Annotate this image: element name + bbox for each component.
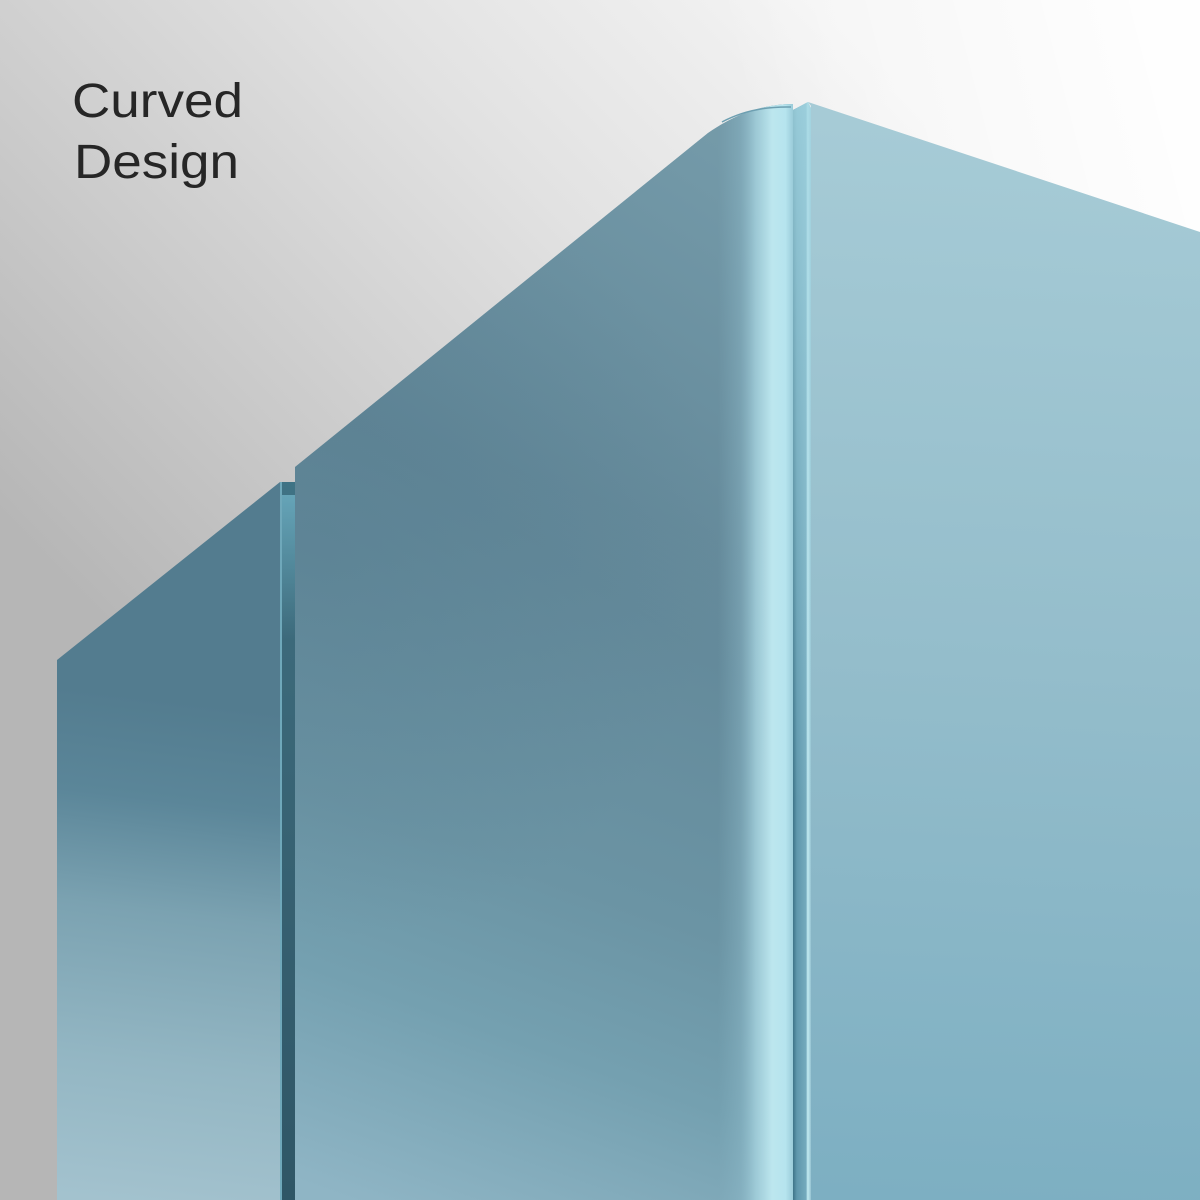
- left cabinet door: [57, 482, 280, 1200]
- title: Design: [74, 136, 239, 189]
- title: Curved: [72, 75, 243, 128]
- vertical metal strip: [793, 102, 811, 1200]
- right cabinet side: [808, 102, 1200, 1200]
- gap between doors: [280, 482, 295, 1200]
- door left shading: [295, 104, 793, 1200]
- curved door edge highlight: [708, 104, 793, 1200]
- middle cabinet door: [295, 104, 793, 1200]
- title: [72, 75, 243, 189]
- curved top edge line: [722, 107, 791, 122]
- door upper shading: [295, 104, 793, 1200]
